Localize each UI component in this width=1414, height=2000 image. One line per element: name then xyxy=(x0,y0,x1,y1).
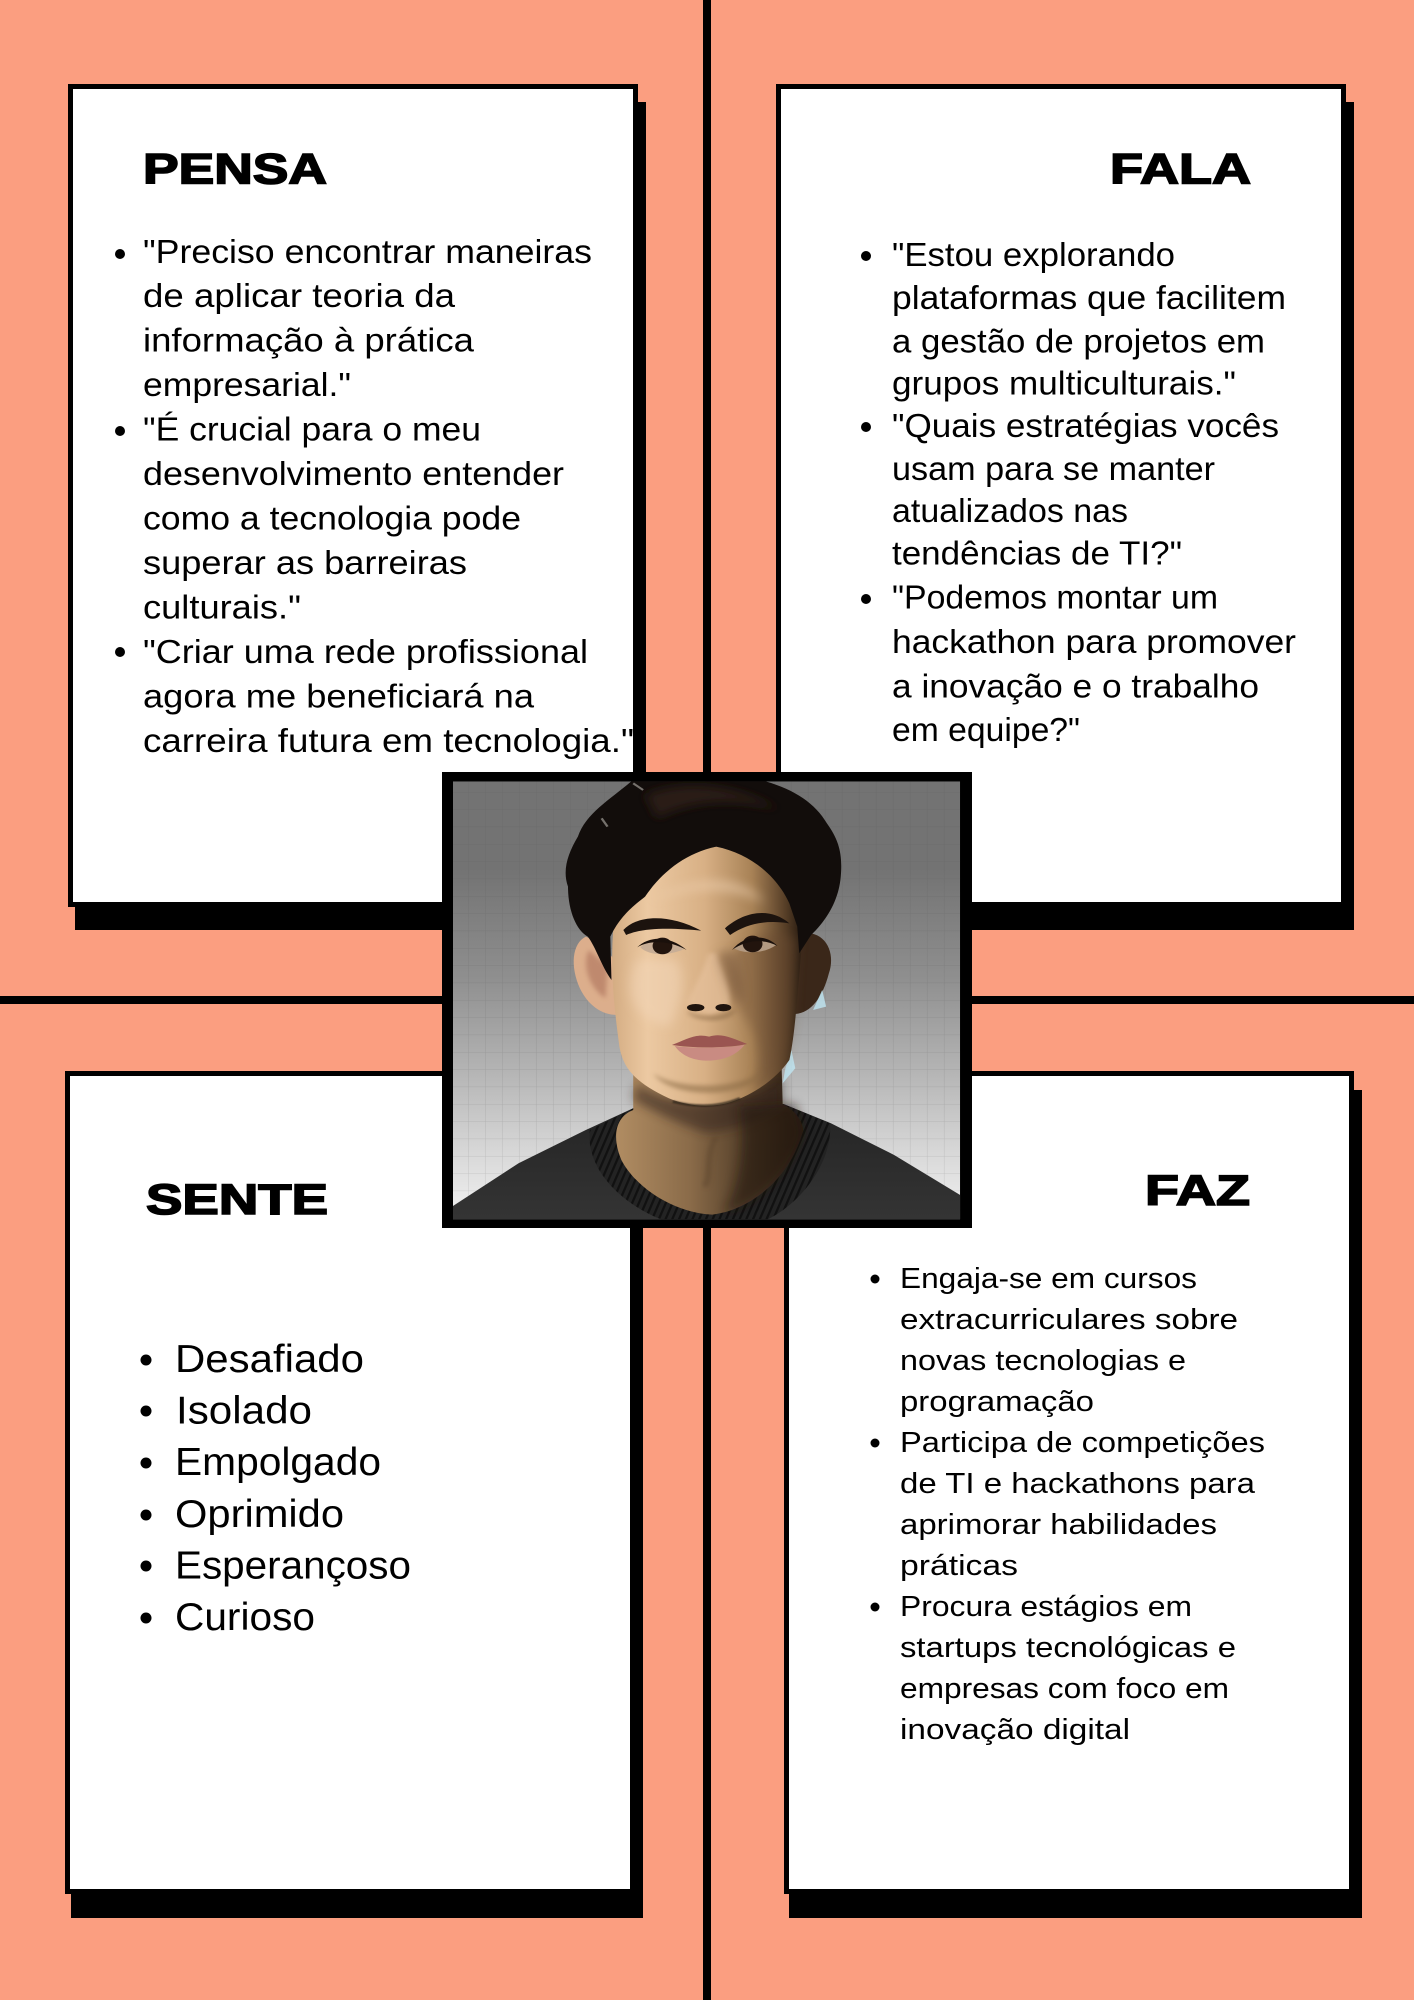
heading: FAZ: FAZ xyxy=(1145,1167,1250,1215)
list: FALA quotes: atualizados nas xyxy=(892,492,1128,529)
list: FALA quotes: em equipe?" xyxy=(892,711,1080,748)
nose xyxy=(687,953,730,1015)
list: FAZ actions: extracurriculares sobre xyxy=(900,1304,1238,1336)
list: FALA quotes: tendências de TI?" xyxy=(892,534,1182,572)
list: FAZ actions: novas tecnologias e xyxy=(900,1345,1186,1377)
list: PENSA thoughts: "Criar uma rede profissional xyxy=(143,633,588,670)
list: PENSA thoughts: desenvolvimento entender xyxy=(143,455,564,492)
list: PENSA thoughts: de aplicar teoria da xyxy=(143,277,456,314)
list: FALA quotes: "Estou explorando xyxy=(892,236,1175,273)
list: FAZ actions: Procura estágios em xyxy=(900,1591,1192,1623)
shading xyxy=(731,934,797,1093)
list: FAZ actions: aprimorar habilidades xyxy=(900,1509,1217,1541)
list: FAZ actions: Participa de competições xyxy=(900,1427,1265,1459)
list: FAZ actions: startups tecnológicas e xyxy=(900,1632,1236,1664)
list: FALA quotes: usam para se manter xyxy=(892,450,1215,487)
panel: FAZ xyxy=(786,1074,1362,1918)
list: SENTE feelings: Esperançoso xyxy=(175,1544,411,1588)
blue glints xyxy=(783,990,826,1083)
list: SENTE feelings xyxy=(140,1338,411,1639)
list: FAZ actions: programação xyxy=(900,1386,1094,1418)
panel: PENSA xyxy=(70,86,646,930)
list: FAZ actions: empresas com foco em xyxy=(900,1673,1229,1705)
list: FALA quotes: "Podemos montar um xyxy=(892,578,1218,616)
list: PENSA thoughts: "Preciso encontrar maneiras xyxy=(143,233,592,270)
eyes xyxy=(640,942,684,954)
list: PENSA thoughts: culturais." xyxy=(143,588,301,626)
list: FAZ actions: Engaja-se em cursos xyxy=(900,1263,1197,1295)
eyebrows xyxy=(623,918,701,935)
face xyxy=(612,847,801,1106)
list: SENTE feelings: Isolado xyxy=(176,1390,312,1432)
lips xyxy=(672,1035,747,1047)
list: FAZ actions xyxy=(870,1263,1265,1746)
ears xyxy=(574,937,619,1015)
list: SENTE feelings: Curioso xyxy=(175,1596,315,1639)
list: SENTE feelings: Desafiado xyxy=(175,1338,364,1381)
heading: PENSA: PENSA xyxy=(143,146,327,194)
portrait photo with black frame xyxy=(442,772,972,1228)
list: SENTE feelings: Empolgado xyxy=(175,1441,381,1484)
hair xyxy=(566,781,841,980)
list: FALA quotes: a inovação e o trabalho xyxy=(892,668,1259,704)
heading: FALA: FALA xyxy=(1110,146,1251,194)
collar xyxy=(589,1104,830,1219)
list: PENSA thoughts: como a tecnologia pode xyxy=(143,500,521,536)
list: FALA quotes: "Quais estratégias vocês xyxy=(892,407,1279,444)
sweater xyxy=(453,1104,960,1219)
list: PENSA thoughts: informação à prática xyxy=(143,322,475,358)
list: PENSA thoughts xyxy=(115,233,634,759)
list: FALA quotes: plataformas que facilitem xyxy=(892,279,1286,316)
list: FALA quotes: grupos multiculturais." xyxy=(892,364,1236,402)
list: PENSA thoughts: agora me beneficiará na xyxy=(143,678,535,714)
list: FALA quotes xyxy=(861,236,1296,748)
neck xyxy=(616,1060,803,1215)
heading: SENTE: SENTE xyxy=(146,1176,328,1224)
list: FAZ actions: práticas xyxy=(900,1550,1018,1582)
list: FALA quotes: a gestão de projetos em xyxy=(892,322,1265,360)
list: PENSA thoughts: superar as barreiras xyxy=(143,544,467,581)
list: PENSA thoughts: carreira futura em tecnologia." xyxy=(143,722,634,759)
list: PENSA thoughts: empresarial." xyxy=(143,366,351,403)
list: FAZ actions: inovação digital xyxy=(900,1714,1130,1746)
panel: FALA xyxy=(778,86,1354,930)
list: FALA quotes: hackathon para promover xyxy=(892,623,1296,660)
panel: SENTE xyxy=(68,1074,643,1918)
list: FAZ actions: de TI e hackathons para xyxy=(900,1468,1256,1500)
list: PENSA thoughts: "É crucial para o meu xyxy=(143,410,481,448)
list: SENTE feelings: Oprimido xyxy=(175,1493,344,1536)
